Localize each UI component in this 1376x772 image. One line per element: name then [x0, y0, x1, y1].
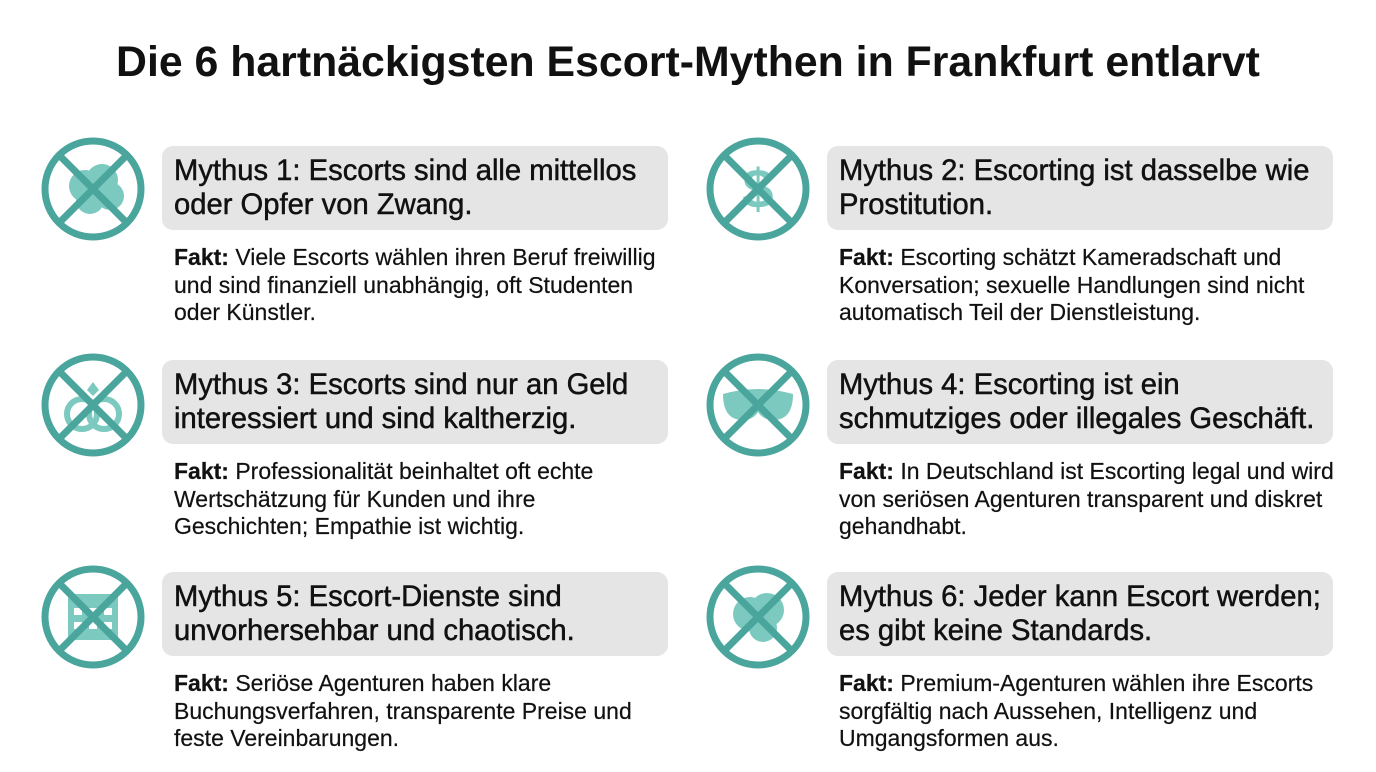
fact text: sorgfältig nach Aussehen, Intelligenz und [839, 698, 1257, 724]
icon: crossed dollar: $ [742, 157, 774, 220]
fact text: oder Künstler. [174, 299, 316, 325]
fact text [839, 244, 1304, 326]
myth heading: Mythus 4: Escorting ist ein [839, 369, 1180, 401]
fact text [839, 670, 1313, 752]
fact text: Umgangsformen aus. [839, 725, 1059, 751]
myth heading [827, 360, 1333, 444]
fact text: Konversation; sexuelle Handlungen sind nicht [839, 272, 1304, 298]
myth heading: unvorhersehbar und chaotisch. [174, 615, 575, 647]
myth heading [827, 146, 1333, 230]
myth heading: Prostitution. [839, 189, 993, 221]
fact text: und sind finanziell unabhängig, oft Studenten [174, 272, 633, 298]
fact text [174, 670, 632, 752]
title: Die 6 hartnäckigsten Escort-Mythen in Frankfurt entlarvt [116, 38, 1260, 86]
fact text: gehandhabt. [839, 513, 967, 539]
myth heading [162, 360, 668, 444]
fact text [174, 244, 656, 325]
fact text [839, 458, 1334, 540]
myth heading: interessiert und sind kaltherzig. [174, 403, 576, 435]
fact text: automatisch Teil der Dienstleistung. [839, 299, 1200, 325]
fact text: feste Vereinbarungen. [174, 725, 399, 751]
fact text: Fakt: Seriöse Agenturen haben klare [174, 670, 551, 696]
icon: crossed cloud [42, 138, 144, 240]
fact text: Fakt: Escorting schätzt Kameradschaft und [839, 244, 1281, 270]
myth heading: schmutziges oder illegales Geschäft. [839, 403, 1314, 435]
panel: myth 1 [42, 138, 668, 325]
myth heading: Mythus 6: Jeder kann Escort werden; [839, 581, 1321, 613]
panel: myth 2 [706, 138, 1333, 326]
panel: myth 6 [706, 566, 1333, 752]
myth heading [162, 146, 668, 230]
panel: myth 5 [42, 566, 668, 752]
fact text: Fakt: In Deutschland ist Escorting legal und wird [839, 458, 1334, 484]
myth heading [827, 572, 1333, 656]
myth heading [162, 572, 668, 656]
myth heading: Mythus 5: Escort-Dienste sind [174, 581, 562, 613]
icon: crossed dollar [706, 138, 810, 240]
fact text: von seriösen Agenturen transparent und diskret [839, 486, 1322, 512]
icon: crossed mask [706, 354, 810, 456]
panel: myth 4 [706, 354, 1334, 540]
icon: crossed head [706, 566, 810, 668]
icon: crossed calendar [42, 566, 144, 668]
myth heading: Mythus 3: Escorts sind nur an Geld [174, 369, 628, 401]
fact text: Geschichten; Empathie ist wichtig. [174, 513, 524, 539]
fact text: Wertschätzung für Kunden und ihre [174, 486, 535, 512]
myth heading: Mythus 1: Escorts sind alle mittellos [174, 155, 636, 187]
panel: myth 3 [42, 354, 668, 540]
myth heading: Mythus 2: Escorting ist dasselbe wie [839, 155, 1309, 187]
fact text: Buchungsverfahren, transparente Preise und [174, 698, 632, 724]
myth heading: oder Opfer von Zwang. [174, 189, 473, 221]
icon: crossed rings [42, 354, 144, 456]
myth heading: es gibt keine Standards. [839, 615, 1152, 647]
fact text: Fakt: Viele Escorts wählen ihren Beruf freiwillig [174, 244, 656, 270]
fact text: Fakt: Professionalität beinhaltet oft echte [174, 458, 593, 484]
fact text: Fakt: Premium-Agenturen wählen ihre Escorts [839, 670, 1313, 696]
fact text [174, 458, 593, 540]
